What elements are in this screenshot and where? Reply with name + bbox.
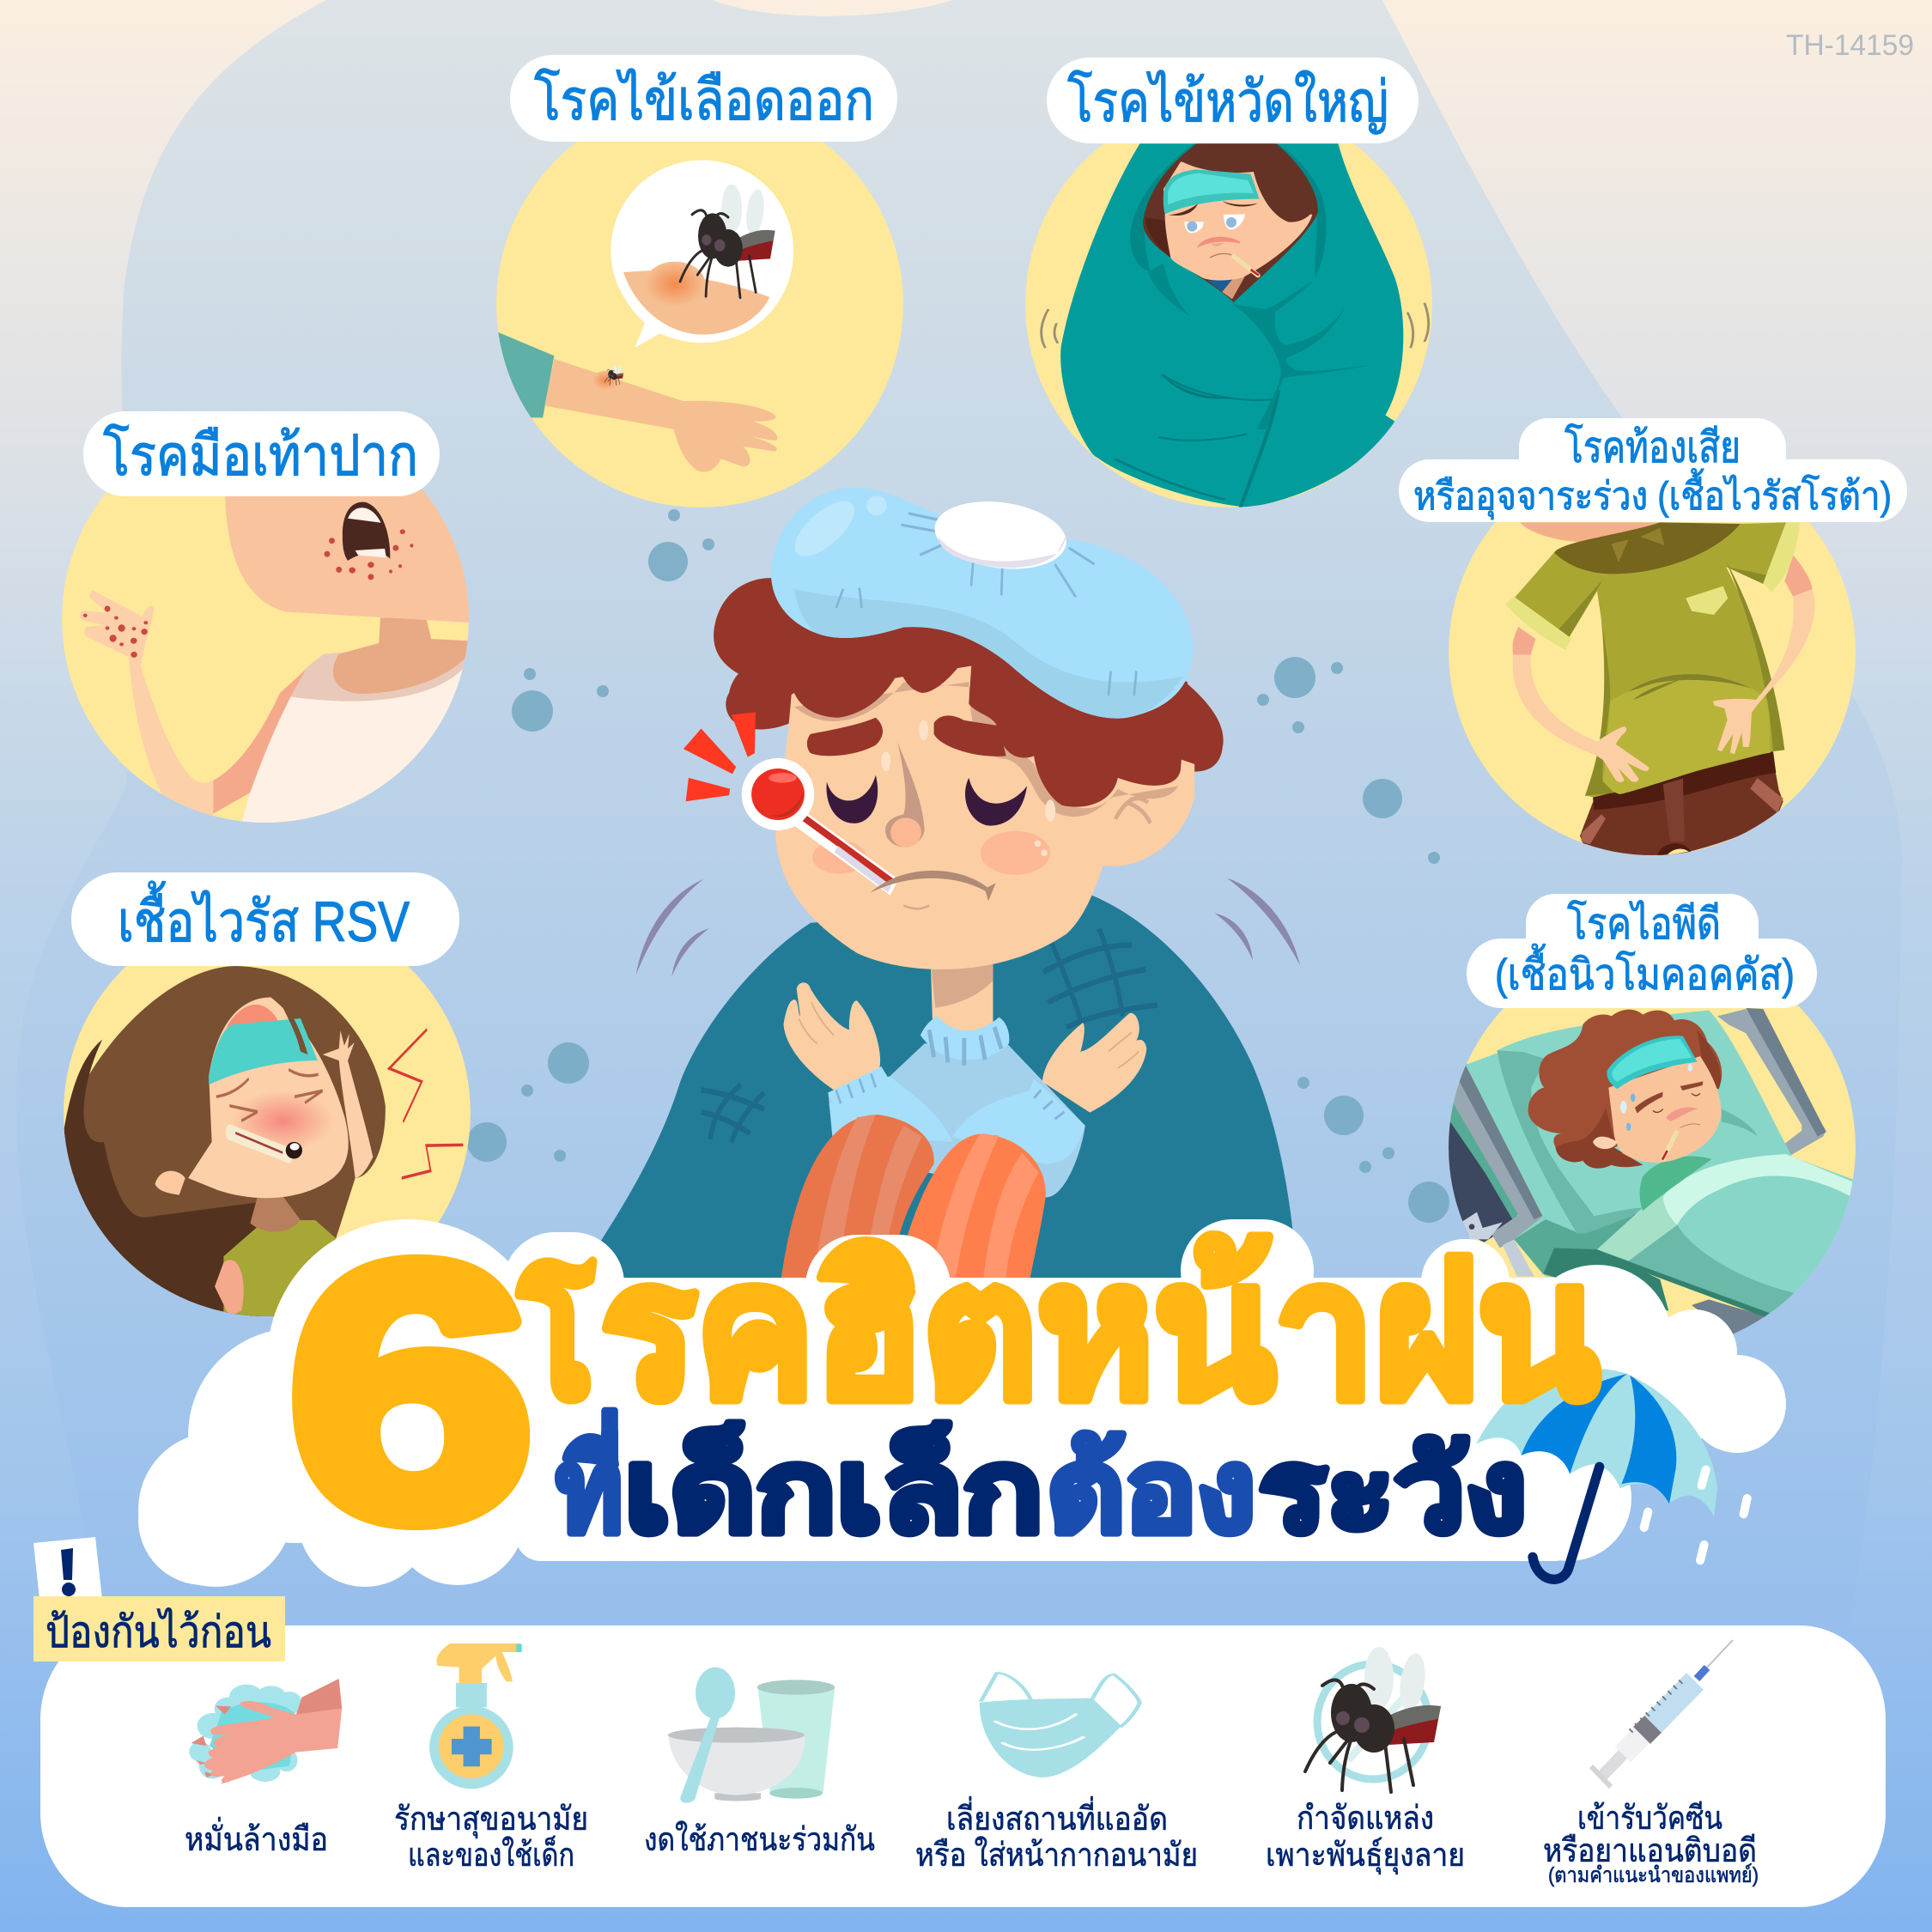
title line two: ต้อง bbox=[1047, 1428, 1255, 1556]
face bbox=[1608, 1056, 1721, 1163]
rain drops bbox=[1644, 1470, 1747, 1560]
caption: mask: เลี่ยงสถานที่แออัด bbox=[946, 1796, 1168, 1838]
blanket patches bbox=[702, 928, 1157, 1142]
ear bbox=[155, 1171, 185, 1195]
shiver lines bbox=[636, 878, 1300, 976]
face bbox=[188, 998, 349, 1198]
panel: IPD circle bbox=[1443, 944, 1861, 1351]
ice bag shade bbox=[794, 589, 1183, 719]
title line two: ระวัง bbox=[1259, 1428, 1527, 1556]
heading pill: RSV: เชื้อไวรัส RSV bbox=[118, 881, 410, 953]
shirt bbox=[241, 648, 472, 823]
arm and hand bbox=[544, 359, 777, 471]
hair bbox=[1182, 143, 1315, 222]
heading pill: hand foot mouth: โรคมือเท้าปาก bbox=[103, 423, 418, 487]
panel: dengue circle bbox=[496, 142, 903, 507]
ice bag bbox=[771, 488, 1194, 719]
hood opening bbox=[1143, 143, 1318, 302]
caption: wash hands: หมั่นล้างมือ bbox=[185, 1817, 328, 1858]
ear bbox=[1115, 799, 1151, 823]
panel: hand foot mouth circle bbox=[62, 489, 469, 823]
caption: mask: หรือ ใส่หน้ากากอนามัย bbox=[915, 1837, 1198, 1874]
bed teal band bbox=[1443, 1082, 1518, 1222]
neck bbox=[931, 962, 1006, 1036]
heading pill: hand foot mouth bbox=[83, 411, 440, 496]
nose bbox=[885, 742, 925, 847]
closed eyes bbox=[216, 1070, 323, 1121]
shiver marks bbox=[1042, 303, 1429, 348]
lower sheet bbox=[1514, 1211, 1637, 1279]
ear bbox=[1593, 1137, 1617, 1149]
sleeve cuffs bbox=[1505, 522, 1800, 650]
blanket folds bbox=[1232, 281, 1371, 429]
heading pill: IPD: โรคไอพีดี bbox=[1567, 900, 1721, 948]
mouth bbox=[343, 502, 390, 561]
blanket bbox=[601, 895, 1298, 1305]
icon: syringe bbox=[1591, 1640, 1733, 1787]
belly folds bbox=[1629, 674, 1752, 700]
shirt collar bbox=[290, 649, 467, 702]
hair shadow bbox=[794, 682, 1178, 817]
prevention label bbox=[33, 1596, 285, 1662]
ice bag cap bbox=[932, 495, 1069, 576]
heading pill: IPD bbox=[1467, 894, 1817, 1008]
striped trousers bbox=[778, 1115, 934, 1305]
neck bbox=[333, 618, 469, 694]
head bbox=[775, 665, 1194, 969]
caption: hygiene: รักษาสุขอนามัย bbox=[394, 1801, 588, 1838]
exclamation note bbox=[33, 1537, 102, 1599]
cheeks bbox=[981, 831, 1050, 875]
ice bag highlights bbox=[787, 491, 861, 567]
pocket bbox=[1686, 586, 1728, 615]
caption: hygiene: และของใช้เด็ก bbox=[408, 1835, 574, 1874]
bitten skin bbox=[623, 270, 769, 335]
closed eyes bbox=[827, 775, 878, 823]
bed frame right bbox=[1717, 1009, 1826, 1157]
shirt and neck bbox=[1208, 279, 1232, 292]
trousers bbox=[1580, 751, 1783, 859]
brows bbox=[1635, 1081, 1703, 1114]
heading pill: influenza bbox=[1047, 58, 1419, 143]
heading pill: diarrhea: โรคท้องเสีย bbox=[1564, 423, 1741, 471]
face bbox=[1163, 161, 1312, 280]
panel: influenza circle bbox=[1025, 143, 1432, 507]
bangs bbox=[280, 1000, 308, 1054]
compress bbox=[209, 1018, 318, 1084]
thermometer bbox=[1662, 1131, 1677, 1161]
chin bbox=[1520, 522, 1660, 543]
panel: diarrhea circle bbox=[1449, 448, 1856, 859]
rash dots on hand bbox=[83, 606, 148, 658]
sweater bbox=[829, 1043, 1085, 1197]
title line two: ที่ bbox=[556, 1410, 623, 1556]
hair fringe bbox=[726, 578, 1188, 807]
belly bbox=[1603, 677, 1771, 794]
mosquito in bubble bbox=[680, 185, 775, 298]
bed frame lower bbox=[1692, 1299, 1771, 1337]
panel: RSV circle bbox=[64, 909, 471, 1340]
sweat bbox=[1620, 1064, 1692, 1131]
icon: sanitizer spray bbox=[429, 1643, 522, 1789]
caption: mosquito control: เพาะพันธุ์ยุงลาย bbox=[1266, 1837, 1465, 1874]
gel pad bbox=[1607, 1036, 1698, 1089]
mattress bbox=[1466, 1054, 1666, 1279]
prevention label: ป้องกันไว้ก่อน bbox=[46, 1607, 271, 1656]
thermometer bbox=[229, 1133, 289, 1155]
upper arm bbox=[213, 669, 307, 814]
cloud behind title bbox=[138, 1219, 1786, 1587]
thermometer bbox=[1234, 256, 1258, 276]
title number six: 6 bbox=[289, 1191, 533, 1594]
collar bbox=[1640, 1157, 1711, 1211]
mouth bbox=[870, 871, 996, 901]
caption: hygiene bbox=[394, 1801, 588, 1874]
hair bbox=[1528, 1010, 1722, 1169]
sweater collar bbox=[920, 1016, 1009, 1060]
watermark code: TH-14159 bbox=[1786, 29, 1914, 62]
title line one: รคฮิตหน้าฝน bbox=[601, 1225, 1599, 1437]
lower folds bbox=[1115, 374, 1279, 507]
bite mark bbox=[592, 371, 620, 390]
caption: no sharing: งดใช้ภาชนะร่วมกัน bbox=[644, 1821, 875, 1858]
main character bbox=[601, 488, 1300, 1305]
upper arms bbox=[1513, 556, 1813, 655]
hair bbox=[64, 966, 386, 1340]
red alert marks bbox=[683, 712, 756, 801]
mouth bbox=[286, 1142, 302, 1159]
nose redness bbox=[233, 1091, 333, 1151]
icon: no mosquito bbox=[1305, 1647, 1441, 1792]
mouth bbox=[1199, 238, 1240, 246]
pain marks bbox=[389, 1030, 463, 1178]
heading pill: diarrhea bbox=[1399, 418, 1907, 522]
caption: vaccine: (ตามคำแนะนำของแพทย์) bbox=[1548, 1863, 1759, 1887]
closed eyes bbox=[1653, 1093, 1700, 1112]
mouth bbox=[1666, 1107, 1698, 1121]
body bbox=[223, 1220, 336, 1340]
arm bbox=[215, 1260, 244, 1316]
bed dark base bbox=[1443, 1110, 1517, 1242]
panel: prevention box bbox=[40, 1625, 1886, 1907]
umbrella canopy bbox=[1476, 1369, 1717, 1517]
umbrella handle bbox=[1533, 1467, 1600, 1579]
pillow bbox=[1497, 1011, 1792, 1222]
icon: washing hands bbox=[189, 1679, 342, 1783]
shirt bbox=[1514, 522, 1786, 797]
bed clip bbox=[1461, 1212, 1503, 1239]
heading pill: dengue: โรคไข้เลือดออก bbox=[534, 68, 874, 131]
caption: vaccine: หรือยาแอนติบอดี bbox=[1543, 1833, 1757, 1869]
bed frame left bbox=[1443, 1054, 1544, 1248]
forehead redness bbox=[227, 1005, 278, 1028]
eyebrows bbox=[807, 718, 883, 756]
icon: bowl spoon and glass bbox=[668, 1668, 835, 1803]
far hair bbox=[714, 578, 1224, 797]
blanket bbox=[1597, 1153, 1861, 1314]
title line two bbox=[556, 1410, 1527, 1556]
caption: mosquito control bbox=[1266, 1801, 1465, 1874]
sweat drops bbox=[919, 720, 928, 740]
thermometer bbox=[742, 758, 895, 889]
heading pill: RSV bbox=[71, 872, 459, 966]
icon: face mask bbox=[980, 1673, 1139, 1777]
eyes bbox=[1184, 214, 1245, 234]
caption: vaccine bbox=[1543, 1801, 1759, 1887]
face bbox=[225, 489, 469, 623]
cold compress bbox=[1163, 169, 1260, 214]
heading pill: IPD: (เชื้อนิวโมคอคคัส) bbox=[1495, 944, 1795, 999]
caption: mask bbox=[915, 1796, 1198, 1874]
sweater cuffs bbox=[828, 1066, 1085, 1131]
brows bbox=[1169, 201, 1258, 216]
caption: mosquito control: กำจัดแหล่ง bbox=[1297, 1801, 1434, 1837]
rash dots on face bbox=[325, 529, 414, 580]
speech bubble bbox=[611, 160, 793, 348]
hands bbox=[784, 982, 880, 1090]
title line two: เด็กเล็ก bbox=[624, 1422, 1043, 1556]
arm bbox=[80, 591, 213, 823]
arms and hands bbox=[1713, 589, 1814, 754]
title line one: โ bbox=[519, 1261, 593, 1428]
hood shade bbox=[1130, 143, 1327, 303]
collar bbox=[1554, 522, 1741, 574]
heading pill: influenza: โรคไข้หวัดใหญ่ bbox=[1067, 70, 1388, 134]
caption: vaccine: เข้ารับวัคซีน bbox=[1577, 1801, 1722, 1837]
shirt side shade bbox=[1557, 561, 1784, 796]
blanket bbox=[1060, 143, 1403, 507]
dark hair bbox=[64, 1040, 259, 1340]
sleeve bbox=[498, 332, 555, 417]
raised arm bbox=[323, 1030, 373, 1178]
swelling bbox=[648, 261, 704, 304]
neck bbox=[250, 1196, 301, 1232]
heading pill: dengue bbox=[510, 55, 897, 142]
decorative bubbles bbox=[467, 509, 1449, 1223]
mosquito on the arm bbox=[605, 365, 623, 386]
